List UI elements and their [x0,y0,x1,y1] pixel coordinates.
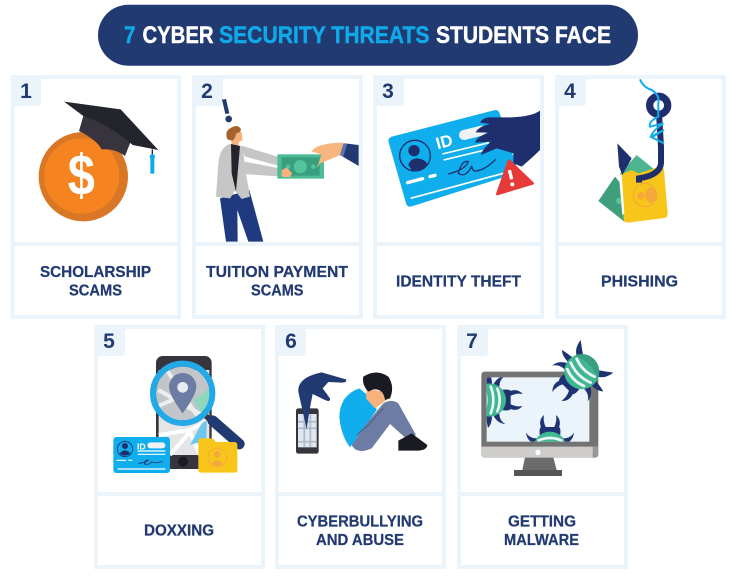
title banner: 7 [124,22,136,49]
icon: phone map, magnifier, ID and folder [113,356,239,473]
label: getting malware: GETTING [508,514,576,531]
number 2: 2 [201,80,213,103]
panel: card 4 phishing [555,75,726,319]
label: phishing: PHISHING [601,274,678,290]
label: scholarship scams: SCHOLARSHIP [40,264,151,281]
label: tuition payment scams [206,264,348,300]
title banner: CYBER [142,22,214,49]
label: tuition payment scams: TUITION PAYMENT [206,264,348,281]
icon: monitor with malware bugs [481,340,614,476]
icon: fishing hook with wallet and cash [598,79,668,223]
title banner: SECURITY THREATS [219,22,430,49]
number 4: 4 [564,80,576,103]
label: identity theft: IDENTITY THEFT [396,274,521,290]
number 7: 7 [466,330,478,353]
icon: coin with graduation cap [39,102,158,221]
icon: person handing over cash [216,99,359,242]
number 5: 5 [103,330,115,353]
label: cyberbullying and abuse: CYBERBULLYING [297,514,423,531]
label: cyberbullying and abuse [297,514,423,549]
label: doxxing: DOXXING [144,523,214,540]
label: getting malware: MALWARE [504,532,579,549]
title banner [98,5,638,66]
title banner: STUDENTS FACE [436,22,611,49]
panel: card 5 doxxing [94,325,265,569]
number 3: 3 [382,80,394,103]
label: tuition payment scams: SCAMS [251,282,304,300]
label: scholarship scams [40,264,151,300]
icon: ID card grabbed by hand [392,111,540,203]
number 6: 6 [285,330,297,353]
panel: card 2 tuition payment scams [192,75,363,319]
panel: card 7 getting malware [457,325,628,569]
icon: ID card grabbed by hand: ID [434,131,455,153]
panel: card 1 scholarship scams [10,75,181,319]
label: getting malware [504,514,579,549]
icon: coin with graduation cap: $ [68,144,95,208]
label: scholarship scams: SCAMS [69,282,122,300]
icon: phone with pointing hand and upset student [296,372,427,454]
panel: card 3 identity theft [373,75,544,319]
icon: phone map, magnifier, ID and folder: ID [137,441,146,451]
panel: card 6 cyberbullying and abuse [275,325,446,569]
label: cyberbullying and abuse: AND ABUSE [316,532,404,549]
number 1: 1 [20,80,32,103]
